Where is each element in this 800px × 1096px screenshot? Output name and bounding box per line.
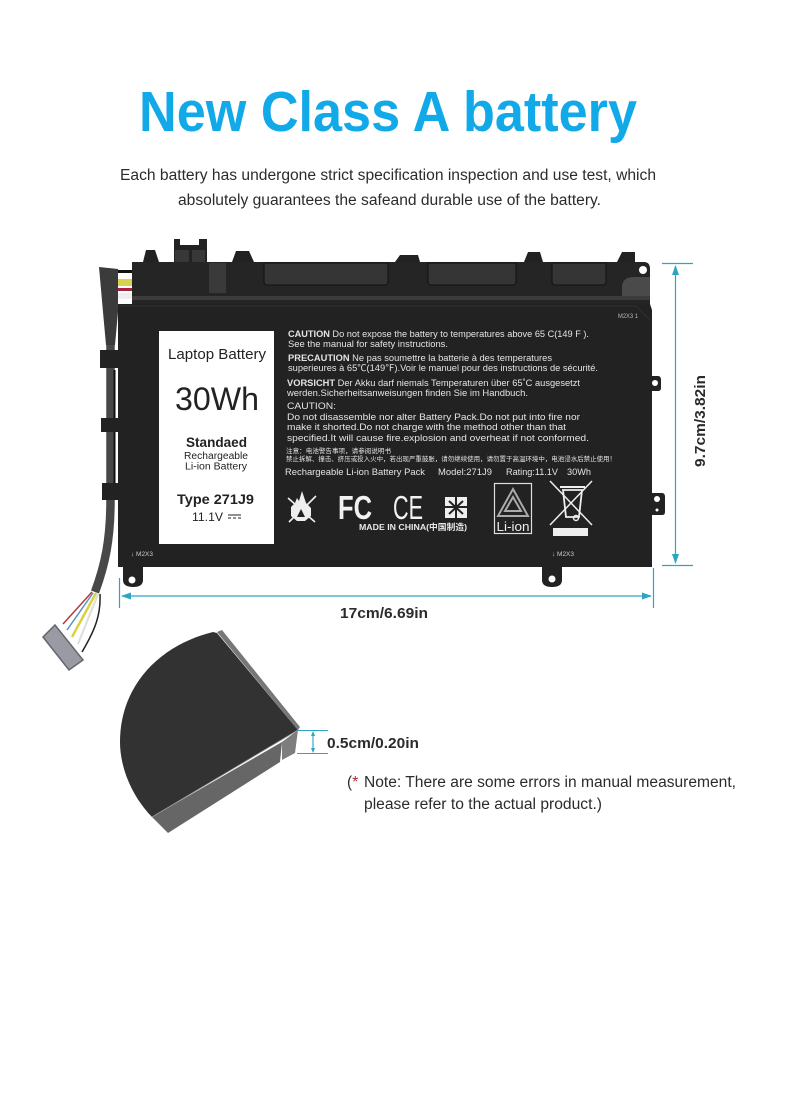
- side and bottom mounting tabs: [123, 376, 665, 587]
- made in china text: MADE IN CHINA(中国制造): [359, 522, 467, 532]
- icon: Li-ion recycling: [494, 484, 532, 534]
- caution text: Do not disassemble nor alter Battery Pack.Do not put into fire nor: [287, 412, 580, 422]
- white product label: 11.1V: [192, 510, 223, 524]
- white product label: Rechargeable: [184, 451, 248, 462]
- note text: (*: [347, 774, 358, 791]
- caution text: make it shorted.Do not charge with the method other than that: [287, 422, 566, 432]
- caution text: Rechargeable Li-ion Battery Pack: [285, 467, 425, 477]
- top clips: [143, 239, 635, 262]
- caution text: 禁止拆解、撞击、挤压或投入火中，若出现严重鼓胀，请勿继续使用，请勿置于高温环境中，电池浸水后禁止使用！: [286, 454, 616, 463]
- white product label: Standaed: [186, 435, 247, 450]
- white product label: [159, 331, 274, 544]
- white product label: Type 271J9: [177, 492, 254, 507]
- thickness label: 0.5cm/0.20in: [327, 735, 419, 752]
- icon: Li-ion recycling: Li-ion: [496, 519, 530, 534]
- caution text: See the manual for safety instructions.: [288, 339, 448, 349]
- width dimension line: [120, 568, 654, 608]
- upper tray: [132, 262, 650, 304]
- battery illustration: ↓ M2X3: [552, 551, 574, 558]
- caution text: 30Wh: [567, 467, 591, 477]
- caution text: 注意：电池警告事项，请参阅说明书: [286, 446, 392, 455]
- caution text: superieures à 65℃(149℉).Voir le manuel pour des instructions de sécurité.: [288, 363, 598, 373]
- icon: CE mark: CE: [393, 489, 423, 526]
- icon: fire hazard: [288, 491, 316, 522]
- white product label: 30Wh: [175, 381, 259, 417]
- icon: crossed-out bin: [550, 481, 592, 536]
- height dimension line: [662, 264, 693, 566]
- white product label: Laptop Battery: [168, 347, 267, 363]
- battery illustration: M2X3 1: [618, 313, 638, 320]
- title: New Class A battery: [139, 80, 637, 144]
- note text: Note: There are some errors in manual measurement,: [364, 774, 736, 791]
- caution text: VORSICHT Der Akku darf niemals Temperaturen über 65˚C ausgesetzt: [287, 378, 580, 388]
- caution text: Model:271J9: [438, 467, 492, 477]
- caution text: Rating:11.1V: [506, 467, 559, 477]
- note text: please refer to the actual product.): [364, 796, 602, 813]
- battery illustration: [43, 239, 665, 670]
- note text: [347, 774, 736, 813]
- intro text: Each battery has undergone strict specification inspection and use test, which: [120, 167, 656, 184]
- icon: FCC mark: FC: [338, 489, 372, 526]
- height label: 9.7cm/3.82in: [692, 375, 709, 467]
- caution text: CAUTION:: [287, 401, 336, 411]
- width label: 17cm/6.69in: [340, 605, 428, 622]
- battery thickness close-up: [120, 630, 300, 833]
- intro text: [120, 167, 656, 209]
- caution text: PRECAUTION Ne pas soumettre la batterie à des temperatures: [288, 353, 552, 363]
- battery connector: [43, 625, 83, 670]
- thickness dimension: [297, 730, 328, 754]
- icon: recycling certification mark: [445, 497, 467, 518]
- caution text: [285, 329, 616, 477]
- intro text: absolutely guarantees the safeand durable use of the battery.: [178, 192, 601, 209]
- battery body: [118, 304, 652, 567]
- battery illustration: ↓ M2X3: [131, 551, 153, 558]
- caution text: CAUTION Do not expose the battery to temperatures above 65 C(149 F ).: [288, 329, 589, 339]
- white product label: Li-ion Battery: [185, 462, 247, 472]
- caution text: specified.It will cause fire.explosion and overheat if not conformed.: [287, 433, 589, 443]
- caution text: werden.Sicherheitsanweisungen finden Sie im Handbuch.: [286, 388, 528, 398]
- battery cable: [63, 267, 133, 652]
